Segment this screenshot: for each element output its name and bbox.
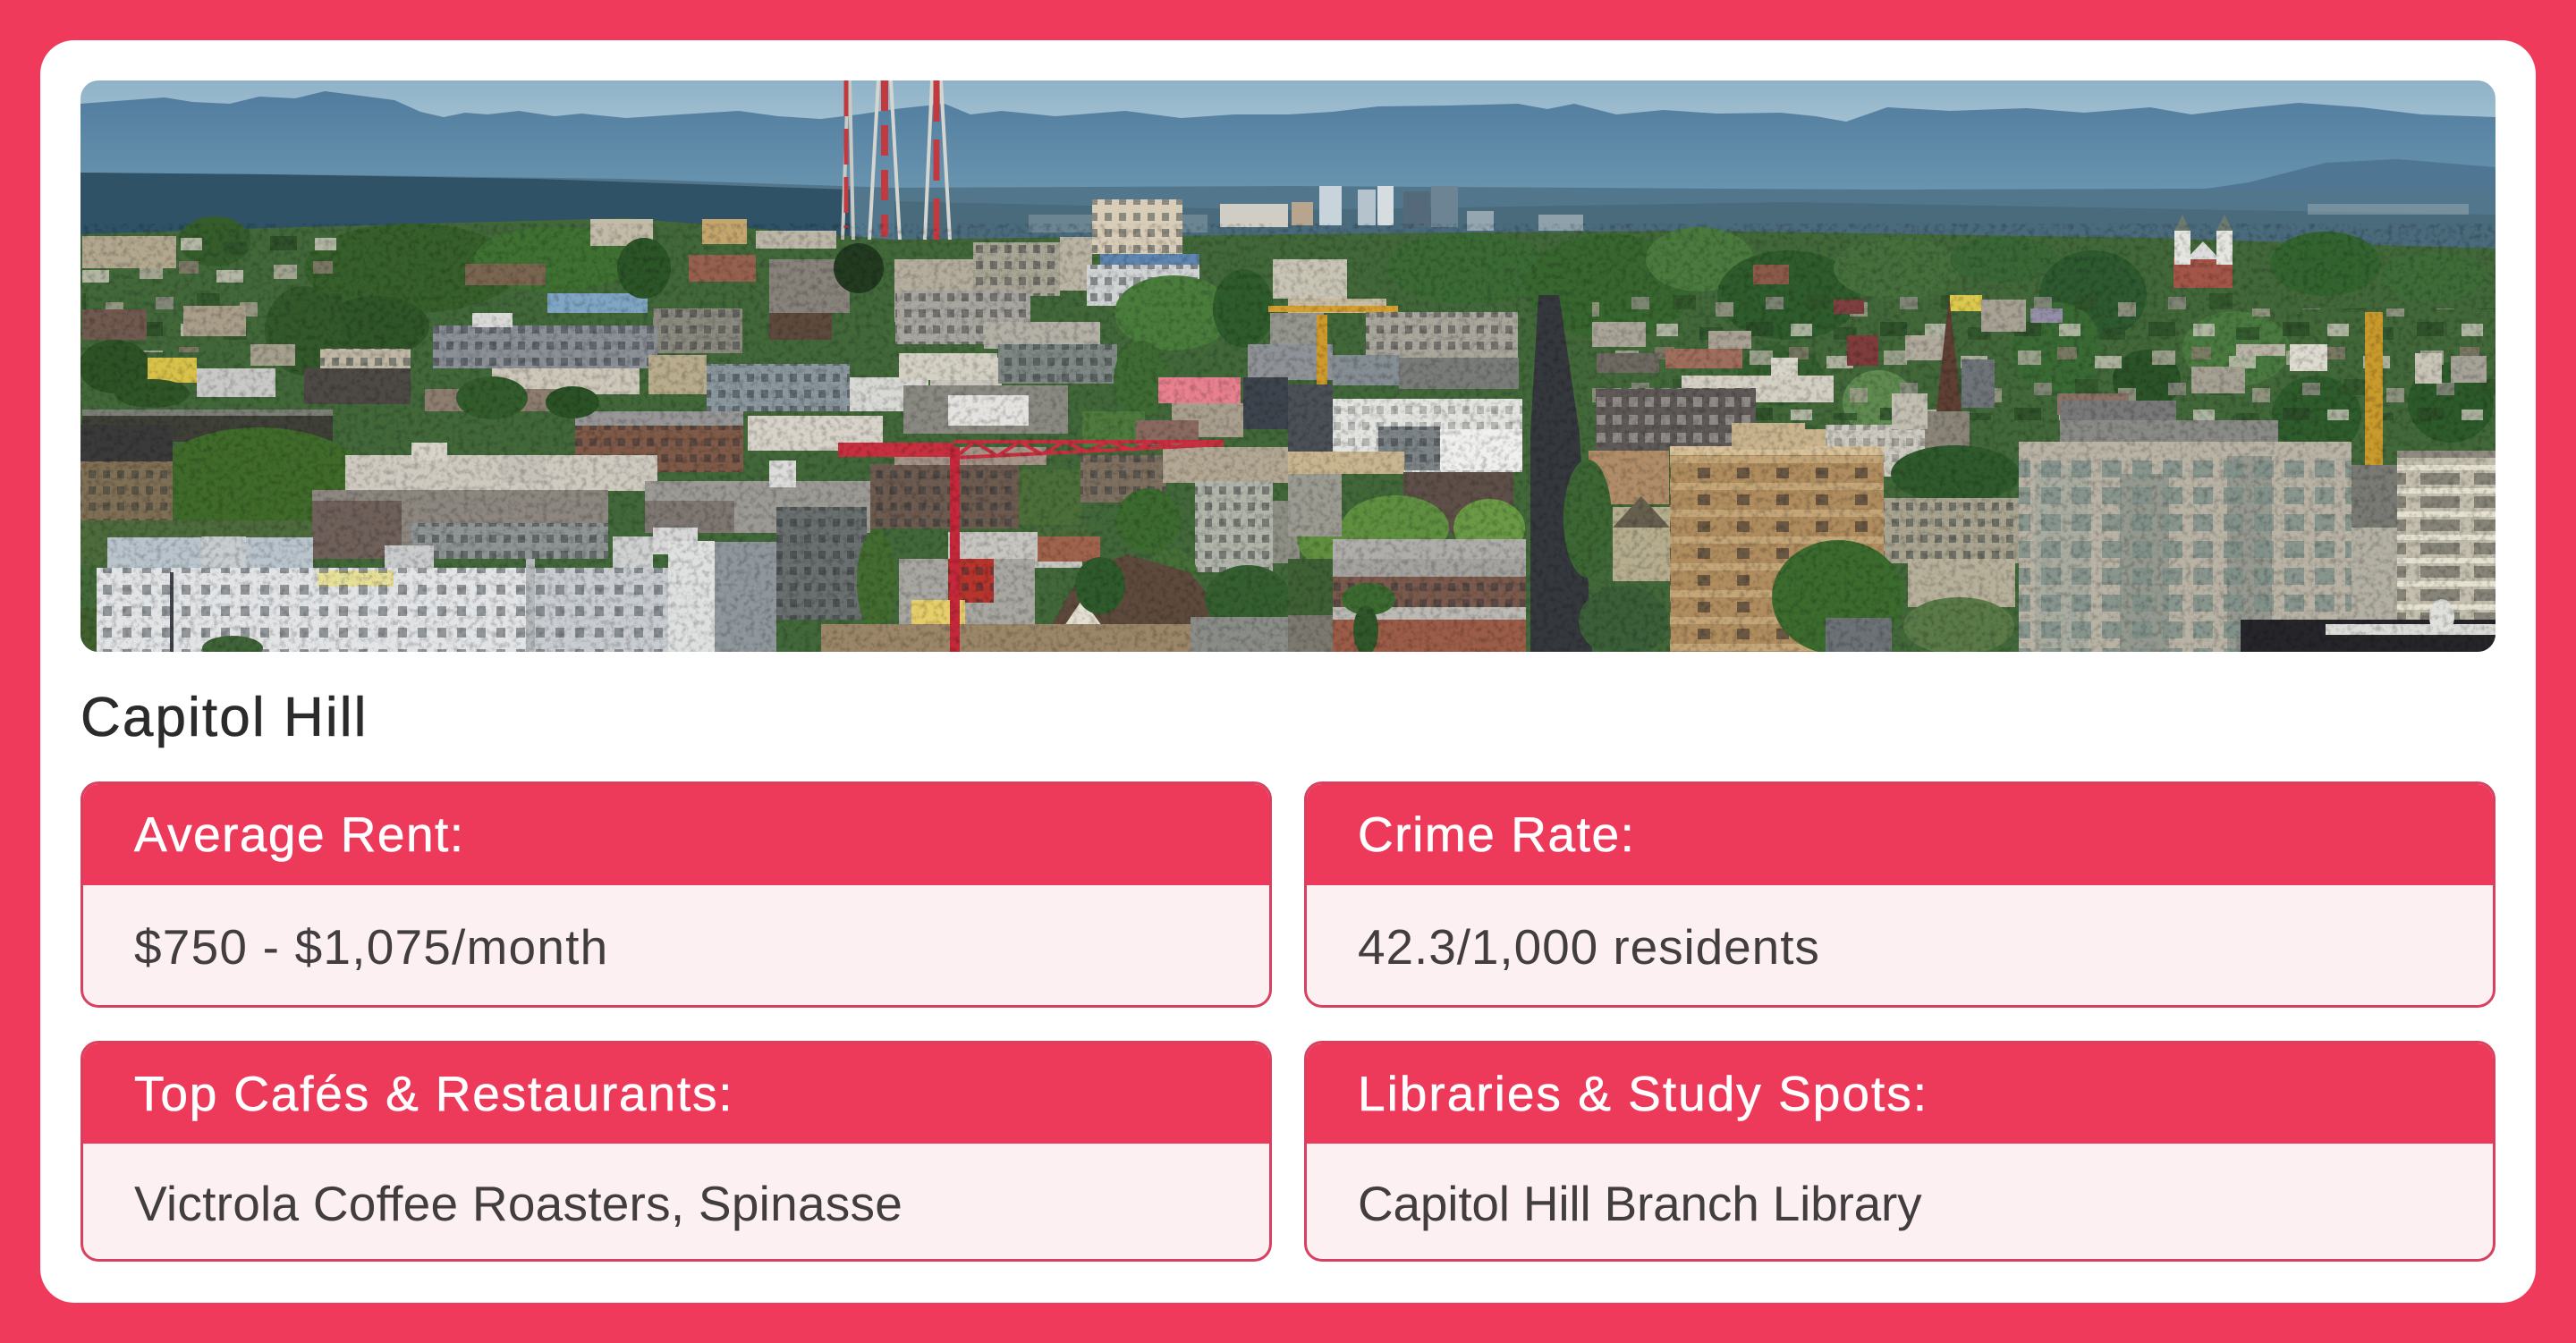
tan and grey mid-rise buildings (1563, 295, 2020, 657)
radio towers (843, 80, 950, 240)
orange construction crane (1268, 306, 1398, 458)
panel header: average rent (80, 781, 1272, 885)
mid buildings behind towers (894, 199, 1518, 382)
panel: libraries and study spots (1304, 1041, 2496, 1262)
distant mountains (80, 91, 2496, 206)
red construction crane (838, 442, 1224, 652)
value: average rent: $750 - $1,075/month (134, 919, 608, 975)
panel: cafes and restaurants (80, 1041, 1272, 1262)
far church with white towers (2174, 215, 2233, 288)
forested ridge (80, 173, 2496, 277)
lower left buildings and trees (80, 425, 896, 661)
label: average rent: Average Rent: (134, 807, 464, 862)
sky (80, 80, 2496, 134)
panel: average rent (80, 781, 1272, 1008)
label: cafes and restaurants: Top Cafés & Restaurants: (134, 1066, 733, 1121)
panel: crime rate (1304, 781, 2496, 1008)
panel header: libraries and study spots (1304, 1041, 2496, 1144)
large condominium tower (2019, 401, 2351, 652)
value: crime rate: 42.3/1,000 residents (1358, 919, 1820, 975)
value: libraries and study spots: Capitol Hill Branch Library (1358, 1176, 1921, 1231)
tree-covered hillside base (80, 218, 2496, 652)
far hill on right (2182, 159, 2496, 215)
right balcony building (2241, 451, 2496, 652)
right side trees and houses (1386, 227, 2496, 456)
foliage and roof texture (80, 224, 2496, 652)
central road and white buildings (1288, 295, 1592, 655)
value: cafes and restaurants: Victrola Coffee Roasters, Spinasse (134, 1176, 902, 1231)
panel header: crime rate (1304, 781, 2496, 885)
left hillside houses and trees (79, 216, 884, 393)
skyscrapers of Bellevue (1220, 186, 1583, 231)
dense central buildings (82, 313, 1288, 472)
label: libraries and study spots: Libraries & Study Spots: (1358, 1066, 1928, 1121)
heading: Capitol Hill: Capitol Hill (80, 687, 369, 748)
label: crime rate: Crime Rate: (1358, 807, 1635, 862)
photo: Capitol Hill aerial skyline (80, 80, 2496, 652)
lower middle buildings (821, 447, 1300, 652)
panel header: cafes and restaurants (80, 1041, 1272, 1144)
yellow crane (2365, 312, 2383, 494)
